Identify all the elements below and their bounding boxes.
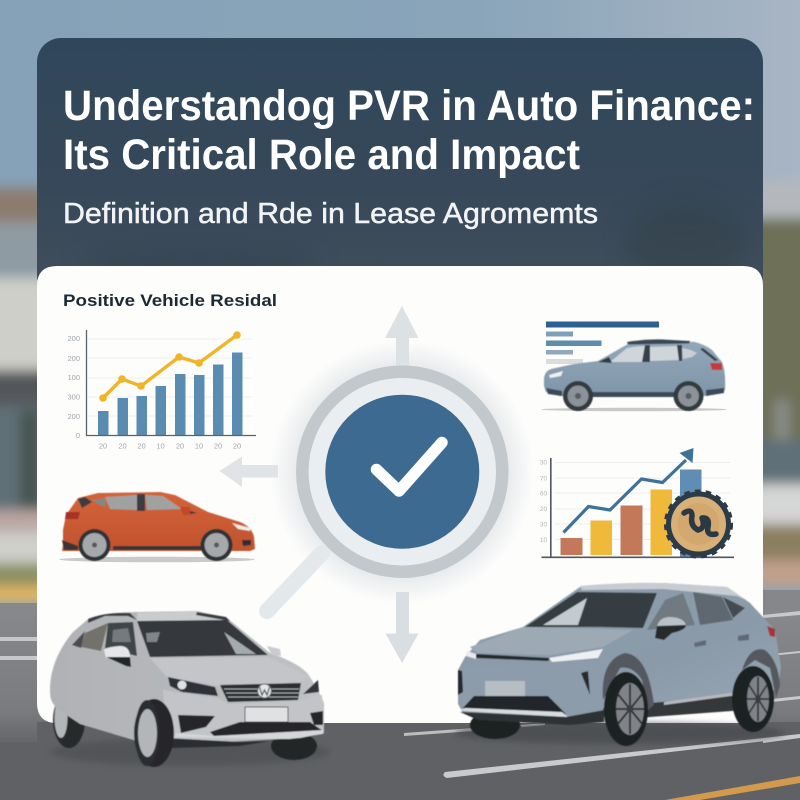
blue circle — [325, 395, 479, 549]
growth chart with badge — [540, 448, 734, 557]
central check emblem with arrows — [220, 306, 534, 663]
lower grille — [462, 696, 566, 714]
blue crossover photo — [455, 583, 785, 746]
heading: Positive Vehicle Residal: Positive Vehicle Residal — [63, 291, 277, 310]
grille — [220, 683, 301, 702]
chart labels — [67, 334, 241, 450]
body — [50, 611, 324, 745]
chart labels: 30 — [540, 460, 547, 466]
chart labels: 20 — [214, 442, 222, 450]
front fascia — [459, 660, 612, 722]
chart labels: 100 — [67, 373, 80, 382]
hood — [470, 627, 633, 655]
side sill and arch — [603, 695, 745, 722]
title — [63, 82, 755, 179]
far front wheel — [470, 711, 520, 739]
windows — [72, 620, 268, 657]
chart labels: 0 — [76, 431, 80, 440]
hood — [150, 657, 310, 686]
chart labels: 60 — [540, 490, 547, 498]
chart labels: 20 — [118, 442, 127, 450]
wheels — [563, 381, 704, 411]
arrow up — [385, 306, 418, 366]
icon: check mark — [376, 442, 442, 491]
ring — [302, 372, 502, 572]
chart labels: 200 — [67, 354, 80, 363]
mirror — [104, 646, 130, 662]
windows — [525, 592, 745, 630]
license plate — [245, 707, 288, 722]
rear wheel — [732, 666, 774, 732]
chart labels: 20 — [233, 442, 241, 450]
door handles and tail light — [694, 634, 749, 647]
road markings — [404, 723, 800, 800]
trend line — [99, 331, 241, 402]
mirror — [655, 617, 686, 640]
chart bars — [560, 470, 702, 556]
chart labels: 20 — [540, 506, 547, 513]
front right wheel — [604, 672, 648, 746]
chart labels: 10 — [540, 537, 547, 544]
far rear wheel — [53, 692, 85, 748]
blue suv illustration with legend bars — [541, 322, 727, 411]
title: Its Critical Role and Impact — [63, 131, 580, 179]
chart labels: 10 — [156, 442, 165, 450]
chart bars — [98, 352, 242, 435]
far front wheel — [271, 732, 317, 760]
chart labels: 300 — [67, 392, 80, 402]
icon: seal badge — [666, 492, 731, 556]
lower bumper — [163, 690, 324, 742]
headlights — [168, 677, 319, 696]
title: Understandog PVR in Auto Finance: — [63, 82, 755, 130]
lower vents — [178, 711, 323, 736]
chart axes — [86, 330, 256, 436]
legend bars — [546, 322, 659, 364]
silver hatchback photo — [50, 611, 330, 767]
grille strip and headlight — [466, 649, 603, 662]
orange car illustration — [59, 492, 255, 562]
wheels — [78, 529, 232, 561]
license plate — [485, 681, 525, 697]
growth arrow — [564, 448, 694, 532]
chart labels: 200 — [67, 412, 80, 421]
chart labels: 10 — [195, 442, 203, 450]
diagonal handle — [267, 553, 322, 611]
chart axes — [542, 458, 734, 557]
front wheel — [134, 699, 174, 767]
chart labels: 20 — [137, 442, 146, 450]
chart labels: 20 — [176, 442, 184, 450]
chart labels: 200 — [67, 334, 80, 343]
arrow left — [220, 456, 278, 487]
bar and line chart — [67, 330, 256, 450]
chart labels: 70 — [540, 476, 547, 482]
body — [458, 583, 781, 724]
chart labels: 30 — [540, 522, 547, 528]
chart labels — [540, 460, 547, 544]
arrow down — [386, 592, 418, 663]
subtitle: Definition and Rde in Lease Agromemts — [63, 198, 598, 230]
header panel — [37, 38, 763, 300]
chart labels: 20 — [99, 442, 107, 450]
white content panel — [37, 266, 763, 723]
